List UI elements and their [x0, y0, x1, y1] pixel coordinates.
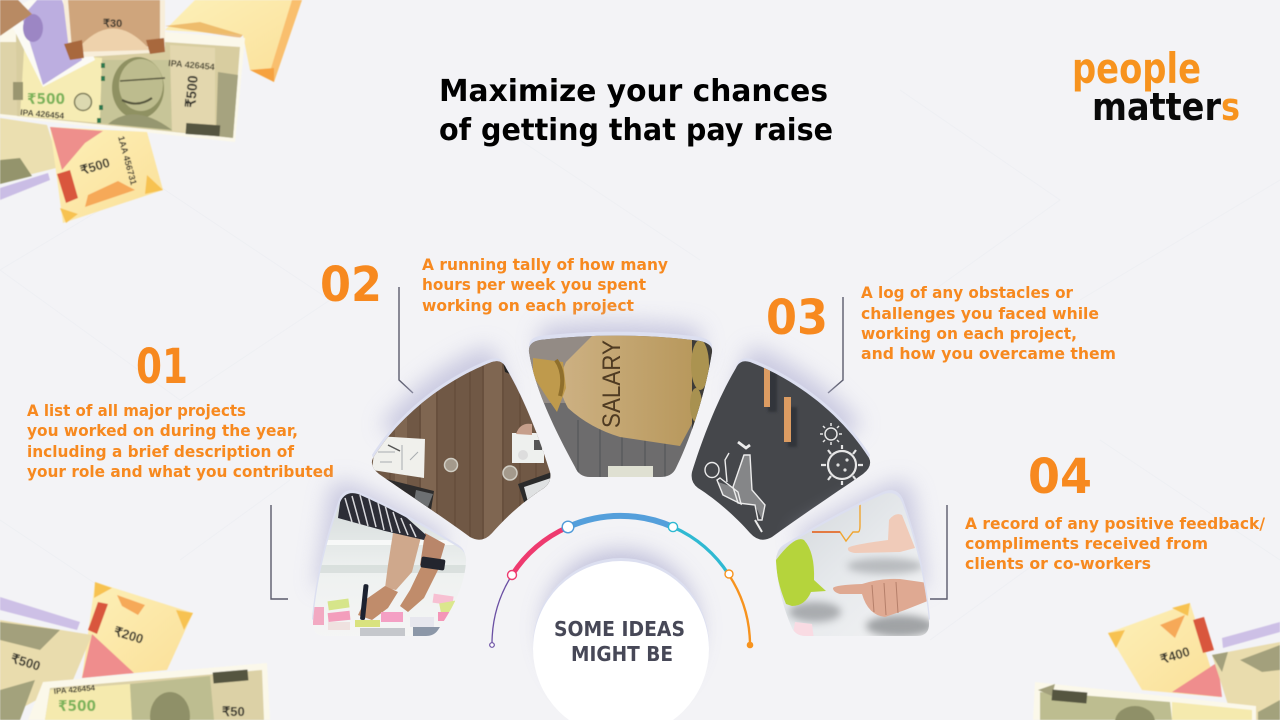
note: main 500: IPA 426454 — [53, 683, 96, 696]
step 04 text — [965, 449, 1265, 573]
centre circle: some ideas might be — [533, 558, 709, 720]
note: purple strip — [0, 597, 80, 630]
note: purple strip — [1222, 622, 1280, 648]
step 01 text: you worked on during the year, — [27, 421, 298, 440]
arc timeline — [490, 516, 753, 648]
note: lower left 500 — [0, 118, 60, 200]
note: orange 200 top — [165, 0, 302, 82]
note: main 500 with portrait: ₹500 — [182, 75, 201, 108]
step 04 text: compliments received from — [965, 534, 1208, 553]
logo: people matters: s — [1221, 85, 1240, 129]
note: beige 500 — [0, 620, 92, 720]
note: main 500: ₹500 — [58, 697, 96, 715]
note: main 500 with portrait: IPA 426454 — [168, 58, 215, 72]
note: beige 500: ₹500 — [9, 651, 42, 674]
note: main 500 with portrait: ₹500 — [27, 90, 65, 108]
segment 2: wooden desk photo — [365, 347, 555, 545]
banknotes: bottom left — [0, 582, 270, 720]
step 03 text: and how you overcame them — [861, 344, 1116, 363]
step 04 text: clients or co-workers — [965, 554, 1151, 573]
note: main 500 with portrait: IPA 426454 — [20, 107, 65, 121]
logo: people matters: people — [1072, 44, 1201, 93]
node: cyan — [668, 522, 678, 532]
step 02 text: working on each project — [422, 296, 634, 315]
note: yellow 200 — [50, 127, 163, 223]
step 01 text: 01 — [136, 339, 188, 395]
node: pink — [508, 570, 516, 580]
logo: people matters — [1072, 44, 1240, 129]
centre circle: some ideas might be: SOME IDEAS — [554, 617, 685, 641]
node: orange filled — [747, 642, 753, 648]
note: main 500 — [28, 663, 270, 720]
step 04 text: 04 — [1028, 449, 1092, 505]
step 01 text — [27, 339, 334, 481]
node: purple — [490, 643, 494, 647]
step 01 text: including a brief description of — [27, 442, 295, 461]
note: beige 500 — [1212, 642, 1280, 720]
step 03 text: 03 — [766, 290, 828, 346]
note: yellow 200: ₹200 — [112, 624, 145, 647]
note: brown 10 — [63, 0, 165, 60]
step 03 text: A log of any obstacles or — [861, 283, 1073, 302]
note: yellow 200: ₹400 — [1158, 644, 1192, 667]
node: orange open — [725, 570, 733, 578]
note: yellow 200 — [82, 582, 193, 678]
title: of getting that pay raise — [439, 113, 833, 148]
note: main 500: ₹50 — [222, 704, 245, 719]
step 03 text: challenges you faced while — [861, 304, 1099, 323]
step 02 text: hours per week you spent — [422, 275, 646, 294]
step 02 text — [320, 255, 669, 315]
step 04 text: A record of any positive feedback/ — [965, 514, 1265, 533]
step 02 text: A running tally of how many — [422, 255, 669, 274]
banknotes: bottom right — [1033, 603, 1280, 720]
note: yellow 200: ₹500 — [78, 155, 112, 178]
segment 4: chalkboard photo — [685, 347, 875, 545]
title — [439, 74, 833, 148]
centre circle: some ideas might be: MIGHT BE — [571, 642, 673, 666]
note: main 500 with portrait — [0, 20, 245, 142]
note: purple 100 — [5, 0, 95, 87]
step 02 text: 02 — [320, 257, 382, 313]
segment 3: salary bag photo — [525, 322, 717, 483]
step 03 text — [766, 283, 1116, 363]
note: yellow 200: 1AA 456731 — [116, 135, 139, 186]
segment 3: salary bag photo: SALARY — [598, 340, 626, 428]
note: brown 10: ₹30 — [103, 18, 122, 30]
step 01 text: your role and what you contributed — [27, 462, 334, 481]
note: brown corner — [0, 0, 32, 36]
step 03 text: working on each project, — [861, 324, 1077, 343]
logo: people matters: matter — [1092, 85, 1221, 129]
leader lines — [271, 287, 947, 599]
title: Maximize your chances — [439, 74, 828, 109]
node: blue — [562, 521, 574, 533]
note: main 500 — [1033, 682, 1256, 720]
centre circle shadow — [543, 550, 699, 706]
segment 1: hands on sticky notes photo — [305, 481, 475, 640]
banknotes: top left — [0, 0, 302, 223]
step 01 text: A list of all major projects — [27, 401, 246, 420]
note: yellow 200 — [1108, 603, 1222, 697]
segment 5: pointing hands photo — [770, 481, 935, 640]
